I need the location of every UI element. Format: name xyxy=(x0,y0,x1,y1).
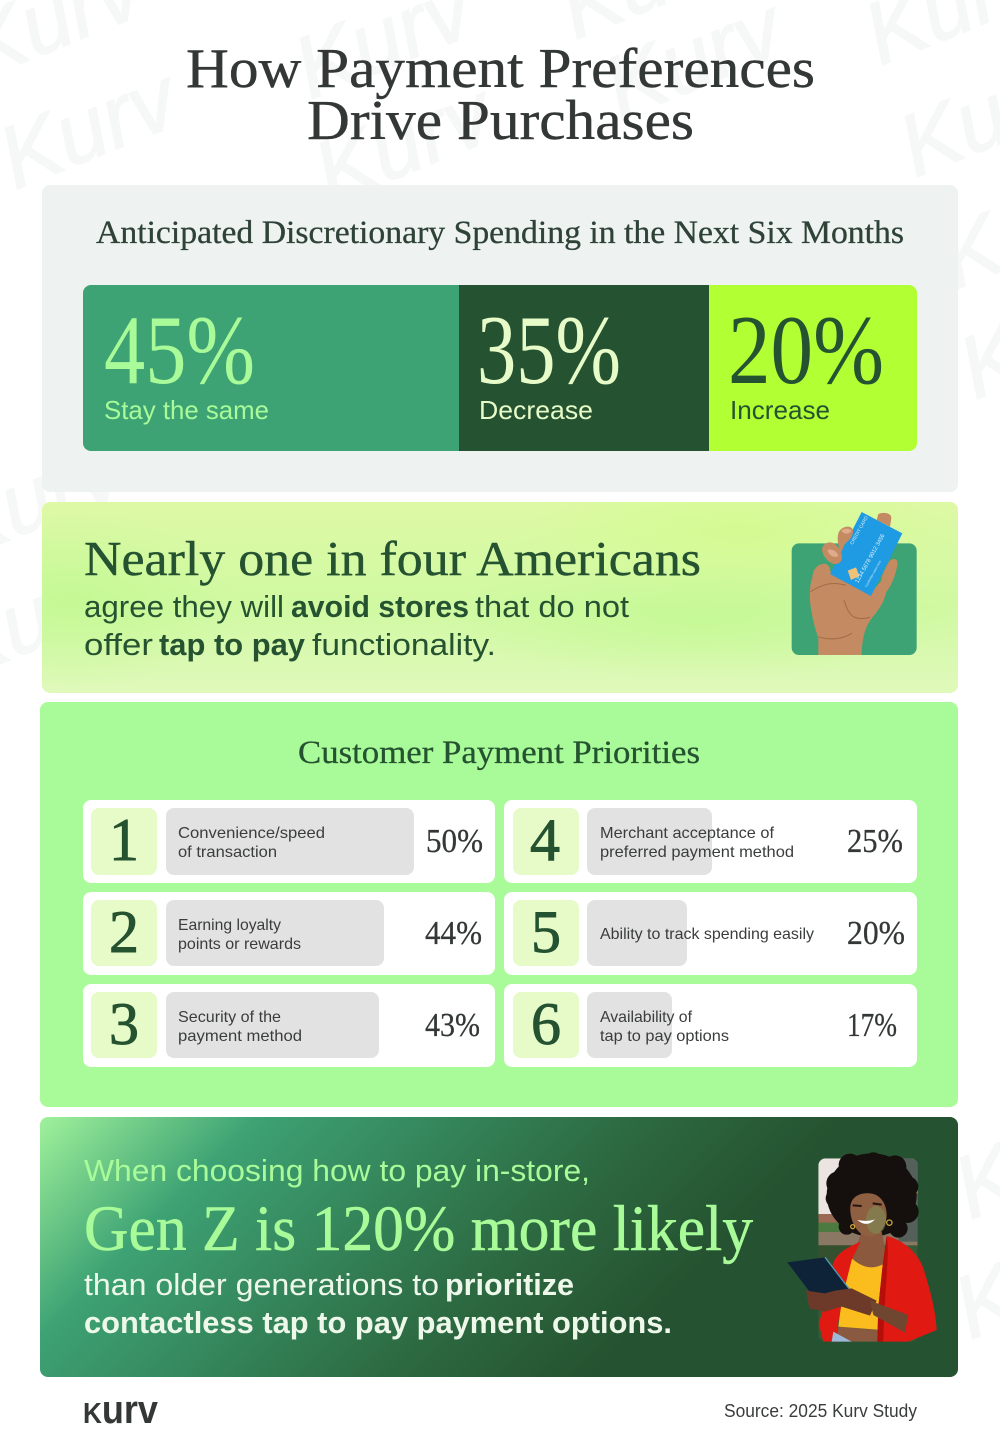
priority 3: 43% xyxy=(425,1007,480,1044)
priority 2: Earning loyalty xyxy=(178,917,281,934)
stat: 35% decrease: 35% xyxy=(477,296,621,405)
priority 5 xyxy=(504,892,917,975)
priority 5: Ability to track spending easily xyxy=(600,926,814,943)
panel heading: spending: Anticipated Discretionary Spending in the Next Six Months xyxy=(96,215,904,251)
priority 1: Convenience/speed xyxy=(178,825,325,842)
gen z body text: contactless tap to pay payment options. xyxy=(84,1305,672,1340)
stat: 45% stay the same: 45% xyxy=(104,296,255,405)
priority 4: 4 xyxy=(530,807,560,873)
priority 4 xyxy=(504,800,917,883)
stat: 45% stay the same: Stay the same xyxy=(104,395,269,425)
stat: 20% increase: 20% xyxy=(728,296,884,405)
priority 2: 44% xyxy=(425,915,482,952)
panel: nearly one in four americans xyxy=(42,502,958,693)
stat: 35% decrease xyxy=(477,296,621,425)
logo: kurv: Kurv xyxy=(83,1388,159,1432)
priority 1: of transaction xyxy=(178,844,277,861)
credit card: Cardholder name here xyxy=(864,559,882,588)
priority 1 xyxy=(83,800,495,883)
priority 2 xyxy=(83,892,495,975)
priority 6: Availability of xyxy=(600,1009,693,1026)
title: Drive Purchases xyxy=(307,90,694,152)
priority 1: 50% xyxy=(426,823,483,860)
priority 3: payment method xyxy=(178,1028,302,1045)
priority 3 xyxy=(83,984,495,1067)
priority 5: 5 xyxy=(531,899,561,965)
priority 2: points or rewards xyxy=(178,936,301,953)
callout body text: tap to pay xyxy=(159,627,306,662)
priority 2: 2 xyxy=(109,899,139,965)
priority 4: Merchant acceptance of xyxy=(600,825,775,842)
credit card xyxy=(830,512,902,596)
stacked bar chart xyxy=(83,285,917,451)
photo: woman holding tablet xyxy=(787,1152,937,1342)
hair xyxy=(826,1152,919,1238)
callout heading: Nearly one in four Americans xyxy=(84,531,701,586)
priority 4: preferred payment method xyxy=(600,844,794,861)
credit card: 1234 5678 9012 3456 xyxy=(855,533,886,584)
icon: hand holding credit card xyxy=(792,512,917,655)
priority 1: 1 xyxy=(109,807,139,873)
priority 3: 3 xyxy=(109,991,139,1057)
stat: 35% decrease: Decrease xyxy=(479,395,593,425)
priority 6: 6 xyxy=(531,991,561,1057)
stat: 20% increase: Increase xyxy=(730,395,830,425)
source note: Source: 2025 Kurv Study xyxy=(724,1401,917,1421)
priority 6 xyxy=(504,984,917,1067)
panel: gen z callout xyxy=(40,1117,958,1377)
panel: customer payment priorities xyxy=(40,702,958,1107)
background watermark pattern: Kurv xyxy=(300,61,510,223)
title xyxy=(186,38,815,152)
title: How Payment Preferences xyxy=(186,38,815,100)
priority 4: 25% xyxy=(847,823,903,860)
callout body text: agree they will xyxy=(84,589,284,624)
callout body text: avoid stores xyxy=(291,589,469,624)
callout body text: functionality. xyxy=(312,627,496,662)
gen z body text xyxy=(84,1267,672,1340)
gen z headline: Gen Z is 120% more likely xyxy=(84,1193,753,1265)
callout body text: that do not xyxy=(475,589,629,624)
callout body text xyxy=(84,589,629,662)
panel: anticipated discretionary spending xyxy=(42,185,958,492)
gen z body text: than older generations to xyxy=(84,1267,439,1302)
panel heading: priorities: Customer Payment Priorities xyxy=(298,735,700,771)
priority 5: 20% xyxy=(847,915,905,952)
gen z intro text: When choosing how to pay in-store, xyxy=(84,1153,590,1188)
priority 6: tap to pay options xyxy=(600,1028,729,1045)
callout body text: offer xyxy=(84,627,153,662)
credit card: CREDIT CARD xyxy=(849,515,869,545)
priority 3: Security of the xyxy=(178,1009,281,1026)
priority 6: 17% xyxy=(847,1007,897,1044)
gen z body text: prioritize xyxy=(445,1267,574,1302)
